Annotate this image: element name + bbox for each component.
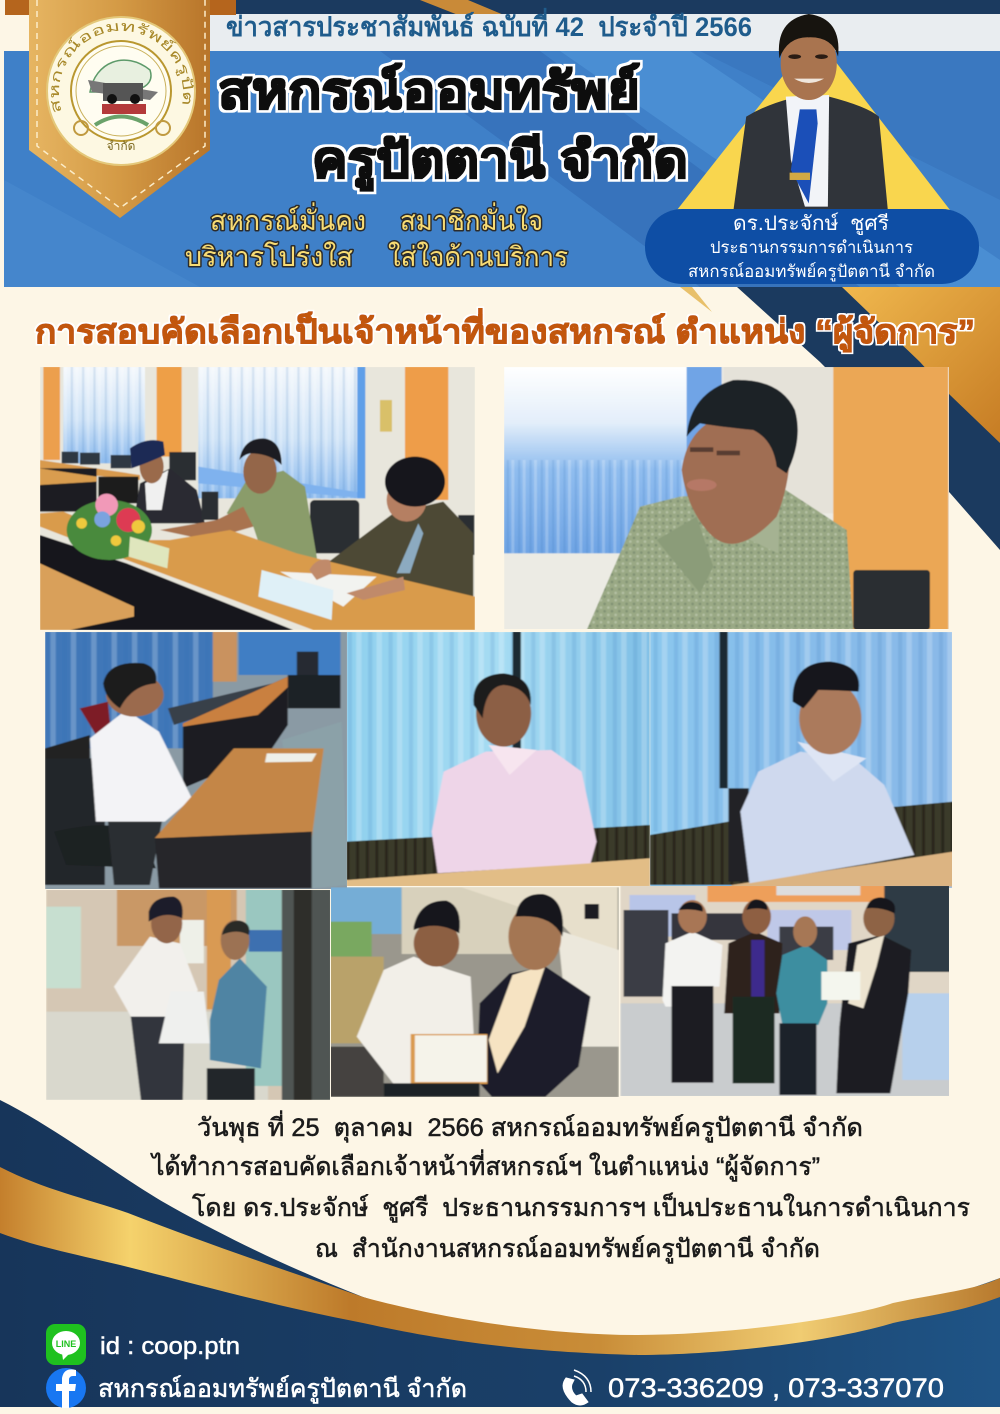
newsletter issue line: ข่าวสารประชาสัมพันธ์ ฉบับที่ 42 ประจำปี 2566 <box>226 7 752 42</box>
body text paragraph: ณ สำนักงานสหกรณ์ออมทรัพย์ครูปัตตานี จำกัด <box>315 1235 820 1264</box>
phone numbers: 073-336209 , 073-337070 <box>608 1373 944 1403</box>
photo: chairman close-up <box>504 367 951 630</box>
bottom wave: navy and gold ribbon <box>0 1100 1000 1407</box>
corner stripes: navy and gold <box>680 287 1000 550</box>
body text paragraph <box>150 1110 970 1264</box>
slogans: บริหารโปร่งใส <box>185 241 353 272</box>
body text paragraph: วันพุธ ที่ 25 ตุลาคม 2566 สหกรณ์ออมทรัพย์ครูปัตตานี จำกัด <box>197 1110 863 1143</box>
logo seal <box>46 16 196 166</box>
section heading: การสอบคัดเลือกเป็นเจ้าหน้าที่ของสหกรณ์ ตำแหน่ง “ผู้จัดการ” <box>35 308 975 353</box>
photo: document handover two <box>330 887 619 1097</box>
portrait of chairman <box>733 14 888 210</box>
slogans <box>185 202 568 272</box>
photo: candidate two <box>347 632 650 887</box>
photo: document handover one <box>46 889 331 1100</box>
photo: candidate three <box>650 632 953 888</box>
logo seal: จำกัด <box>107 139 135 153</box>
icon: telephone <box>563 1370 591 1405</box>
main title line 2: ครูปัตตานี จำกัด <box>312 132 688 191</box>
line id text: id : coop.ptn <box>100 1333 240 1360</box>
header band <box>4 0 1000 287</box>
body text paragraph: ได้ทำการสอบคัดเลือกเจ้าหน้าที่สหกรณ์ฯ ในตำแหน่ง “ผู้จัดการ” <box>150 1149 820 1182</box>
name pill: สหกรณ์ออมทรัพย์ครูปัตตานี จำกัด <box>688 262 935 282</box>
body text paragraph: โดย ดร.ประจักษ์ ชูศรี ประธานกรรมการฯ เป็นประธานในการดำเนินการ <box>192 1192 970 1223</box>
slogans: ใส่ใจด้านบริการ <box>388 241 568 272</box>
yellow triangle behind portrait <box>677 35 950 210</box>
icon: Facebook <box>46 1368 86 1408</box>
photo: committee at table <box>40 367 475 630</box>
gold ribbon badge with coop logo <box>29 0 210 218</box>
slogans: สมาชิกมั่นใจ <box>400 202 543 236</box>
name pill <box>645 209 979 284</box>
slogans: สหกรณ์มั่นคง <box>210 202 366 236</box>
name pill: ประธานกรรมการดำเนินการ <box>710 238 913 257</box>
facebook page name: สหกรณ์ออมทรัพย์ครูปัตตานี จำกัด <box>98 1375 467 1404</box>
name pill: ดร.ประจักษ์ ชูศรี <box>733 212 889 236</box>
top brown bar <box>5 0 236 15</box>
photo: candidate one at desk <box>45 632 348 890</box>
icon: LINE: LINE <box>56 1339 76 1349</box>
icon: LINE <box>46 1324 86 1365</box>
main title line 1: สหกรณ์ออมทรัพย์ <box>218 63 640 119</box>
photo: group with document <box>621 885 950 1097</box>
